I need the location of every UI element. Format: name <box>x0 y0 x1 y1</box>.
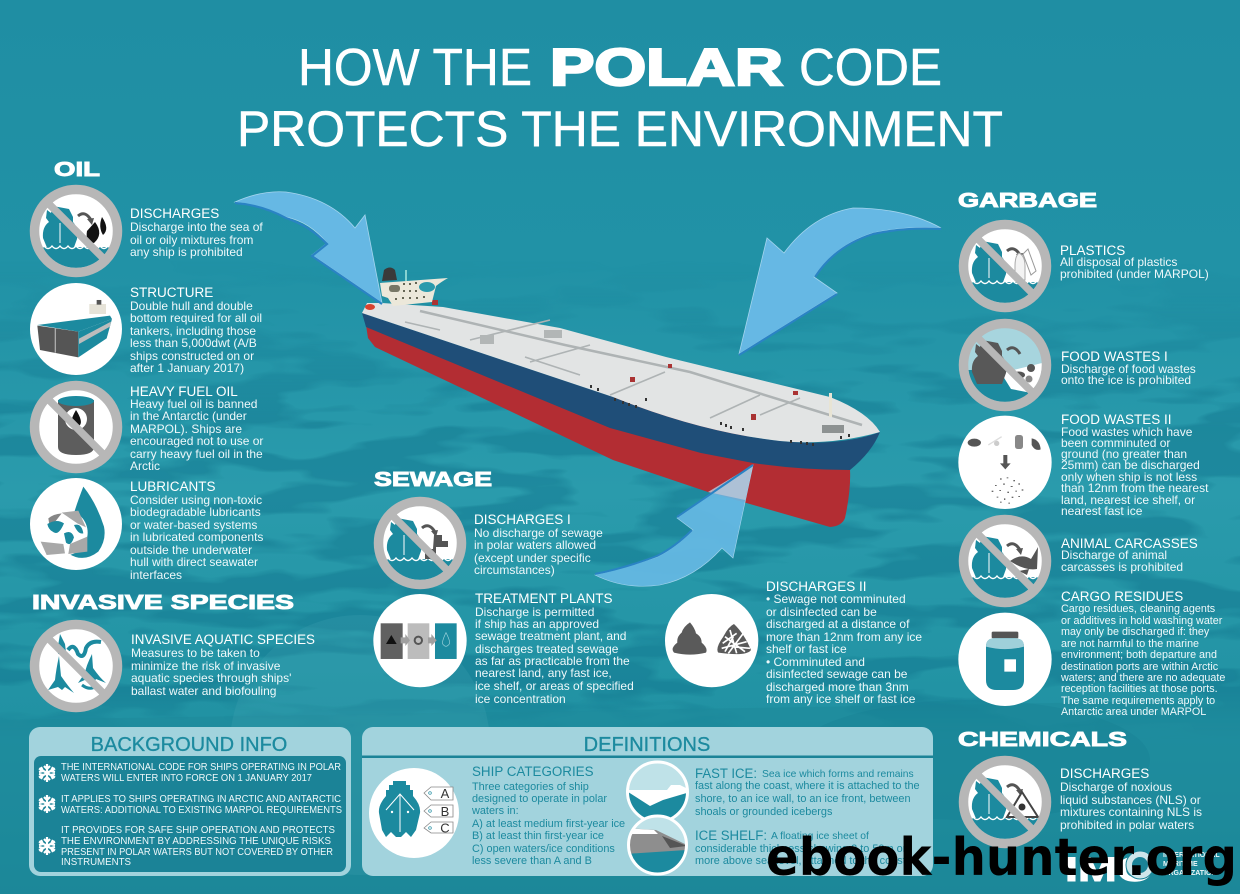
text: cargo residues: CARGO RESIDUES <box>1061 589 1183 604</box>
text: lubricants: LUBRICANTS <box>130 479 216 494</box>
deck <box>362 303 880 442</box>
text: plastics: All disposal of plastics <box>1060 255 1177 269</box>
text: ship categories: B) at least thin first-year ice <box>472 830 604 842</box>
text: entry into force: THE INTERNATIONAL CODE FOR SHIPS OPERATING IN POLAR <box>61 762 341 773</box>
heading: chemicals: CHEMICALS <box>958 729 1127 751</box>
text: cargo residues: environment; both departure and <box>1061 649 1217 661</box>
text: ice shelf: more above sea level, attached to the coast <box>695 855 906 867</box>
arrow: to oil tanker from the left <box>235 192 382 304</box>
text: discharges I: DISCHARGES I <box>474 512 571 527</box>
text: discharges: oil or oily mixtures from <box>130 233 253 247</box>
icon: comminuted food wastes <box>958 416 1052 509</box>
text: treatment plants: Discharge is permitted <box>475 605 594 619</box>
text: chemical discharges: mixtures containing NLS is <box>1060 805 1202 819</box>
text: structure: Double hull and double <box>130 299 253 313</box>
text: food wastes II: been comminuted or <box>1061 436 1170 450</box>
text: discharges I: in polar waters allowed <box>474 538 596 552</box>
text: discharges II: disinfected sewage can be <box>766 667 908 681</box>
text: food wastes I: onto the ice is prohibited <box>1061 373 1191 387</box>
text: ship categories: C) open waters/ice conditions <box>472 843 615 855</box>
text: ice shelf: A floating ice sheet of <box>771 831 869 842</box>
text: heavy fuel oil: encouraged not to use or <box>130 434 263 448</box>
panel: oil <box>30 159 263 582</box>
logo: IMO: MARITIME <box>1163 861 1198 868</box>
text: invasive aquatic species: Measures to be taken to <box>131 646 260 660</box>
oil tanker ship <box>362 268 880 527</box>
icon: no plastics <box>964 224 1046 312</box>
icon: ship categories: C <box>440 820 450 836</box>
text: discharges II: discharged more than 3nm <box>766 680 909 694</box>
icon: ship categories: B <box>441 804 449 819</box>
text: treatment plants: sewage treatment plant, and <box>475 629 626 643</box>
text: entry into force: WATERS WILL ENTER INTO FORCE ON 1 JANUARY 2017 <box>61 773 312 784</box>
superstructure <box>380 278 448 306</box>
logo: IMO: INTERNATIONAL <box>1163 852 1220 859</box>
text: food wastes II: only when ship is not less <box>1061 470 1197 484</box>
title: CODE <box>799 39 942 97</box>
text: discharges II: • Comminuted and <box>766 655 865 669</box>
title: HOW THE <box>298 39 532 97</box>
text: food wastes II: ground (no greater than <box>1061 447 1187 461</box>
text: chemical discharges: DISCHARGES <box>1060 766 1149 781</box>
text: animal carcasses: Discharge of animal <box>1061 548 1167 562</box>
text: structure: tankers, including those <box>130 324 256 338</box>
text: invasive aquatic species: INVASIVE AQUATIC SPECIES <box>131 632 315 647</box>
text: structure: ships constructed on or <box>130 349 254 363</box>
text: structure: less than 5,000dwt (A/B <box>130 336 257 350</box>
text: lubricants: outside the underwater <box>130 543 252 557</box>
text: application: WATERS: ADDITIONAL TO EXISTING MARPOL REQUIREMENTS <box>61 805 343 816</box>
text: cargo residues: are not harmful to the marine <box>1061 638 1199 650</box>
icon: ship categories: A <box>441 786 450 801</box>
heading: invasive species: INVASIVE SPECIES <box>32 592 294 614</box>
text: safe operation: THE ENVIRONMENT BY ADDRESSING THE UNIQUE RISKS <box>61 836 332 847</box>
title: POLAR <box>550 39 783 97</box>
icon: no invasive aquatic species <box>34 624 118 708</box>
text: chemical discharges: liquid substances (NLS) or <box>1060 793 1201 807</box>
text: heavy fuel oil: MARPOL). Ships are <box>130 422 242 436</box>
text: ship categories: A) at least medium first-year ice <box>472 818 625 830</box>
text: safe operation: INSTRUMENTS <box>61 857 132 868</box>
text: food wastes I: FOOD WASTES I <box>1061 349 1168 364</box>
text: discharges: DISCHARGES <box>130 206 219 221</box>
text: discharges: Discharge into the sea of <box>130 220 263 234</box>
text: discharges I: No discharge of sewage <box>474 526 603 540</box>
text: fast ice: shore, to an ice wall, to an ice front, between <box>695 793 911 805</box>
text: lubricants: in lubricated components <box>130 530 263 544</box>
arrow: to oil tanker from below <box>595 465 753 586</box>
text: chemical discharges: Discharge of noxious <box>1060 780 1172 794</box>
text: animal carcasses: ANIMAL CARCASSES <box>1061 536 1198 551</box>
icon: lubricants drop and globe <box>30 478 122 570</box>
heading: sewage: SEWAGE <box>374 469 492 491</box>
icon: ship categories <box>369 768 459 858</box>
text: heavy fuel oil: carry heavy fuel oil in the <box>130 447 263 461</box>
icon: cargo residue jar <box>958 613 1052 706</box>
text: ship categories: SHIP CATEGORIES <box>472 764 594 779</box>
panel: chemicals <box>958 729 1202 848</box>
text: discharges II: discharged at a distance of <box>766 617 910 631</box>
text: application: IT APPLIES TO SHIPS OPERATING IN ARCTIC AND ANTARCTIC <box>61 794 341 805</box>
panel: definitions <box>362 727 933 877</box>
text: discharges II: shelf or fast ice <box>766 642 847 656</box>
text: lubricants: interfaces <box>130 568 182 582</box>
heading: garbage: GARBAGE <box>958 190 1097 212</box>
text: discharges II: from any ice shelf or fast ice <box>766 692 916 706</box>
text: plastics: prohibited (under MARPOL) <box>1060 267 1209 281</box>
text: fast ice: Sea ice which forms and remains <box>762 769 914 780</box>
panel: background info <box>29 727 351 876</box>
title <box>237 39 1003 157</box>
panel: sewage <box>373 469 922 706</box>
icon: no sewage discharge <box>378 502 462 589</box>
icon: no chemical discharge <box>964 760 1046 848</box>
text: ice shelf: ICE SHELF: <box>695 828 767 843</box>
logo: IMO: ORGANIZATION <box>1163 870 1217 877</box>
text: heavy fuel oil: Arctic <box>130 459 160 473</box>
hull: red lower <box>366 325 850 527</box>
text: food wastes II: than 12nm from the nearest <box>1061 481 1209 495</box>
text: cargo residues: or additives in hold washing water <box>1061 615 1223 627</box>
text: lubricants: hull with direct seawater <box>130 555 258 569</box>
text: treatment plants: ice concentration <box>475 692 566 706</box>
heading: oil: OIL <box>54 159 100 181</box>
text: fast ice: shoals or grounded icebergs <box>695 806 833 818</box>
icon: snowflake 1 <box>39 764 55 782</box>
text: heavy fuel oil: in the Antarctic (under <box>130 409 247 423</box>
text: ship categories: less severe than A and B <box>472 855 592 867</box>
text: plastics: PLASTICS <box>1060 243 1125 258</box>
text: discharges: any ship is prohibited <box>130 245 243 259</box>
text: treatment plants: if ship has an approved <box>475 617 599 631</box>
text: discharges II: • Sewage not comminuted <box>766 592 906 606</box>
icon: ice shelf <box>625 816 691 877</box>
text: lubricants: Consider using non-toxic <box>130 493 262 507</box>
text: cargo residues: destination ports are within Arctic <box>1061 661 1219 673</box>
text: cargo residues: waters; and there are no adequate <box>1060 672 1225 684</box>
text: ship categories: waters in: <box>471 805 519 817</box>
title: PROTECTS THE ENVIRONMENT <box>237 101 1003 157</box>
text: cargo residues: Cargo residues, cleaning agents <box>1061 603 1215 615</box>
text: heavy fuel oil: HEAVY FUEL OIL <box>130 384 238 399</box>
text: food wastes II: land, nearest ice shelf, or <box>1061 493 1195 507</box>
arrow: to oil tanker from the right <box>739 208 941 355</box>
icon: snowflake 3 <box>39 837 55 855</box>
text: treatment plants: TREATMENT PLANTS <box>475 591 613 606</box>
text: food wastes II: nearest fast ice <box>1061 504 1143 518</box>
text: ship categories: Three categories of ship <box>472 781 589 793</box>
text: discharges II: more than 12nm from any ice <box>766 630 922 644</box>
text: safe operation: IT PROVIDES FOR SAFE SHIP OPERATION AND PROTECTS <box>61 825 336 836</box>
icon: no oil discharge <box>34 190 118 277</box>
text: discharges II: DISCHARGES II <box>766 579 867 594</box>
text: structure: bottom required for all oil <box>130 311 262 325</box>
text: treatment plants: as far as practicable from the <box>475 654 630 668</box>
text: invasive aquatic species: ballast water and biofouling <box>131 684 276 698</box>
text: food wastes II: FOOD WASTES II <box>1061 412 1172 427</box>
text: cargo residues: reception facilities at those ports. <box>1061 683 1218 695</box>
text: lubricants: biodegradable lubricants <box>130 505 261 519</box>
text: ice shelf: considerable thickness showing 2 to 50m or <box>695 843 907 855</box>
text: discharges I: circumstances) <box>474 563 555 577</box>
heading: definitions: DEFINITIONS <box>584 734 710 756</box>
text: food wastes I: Discharge of food wastes <box>1061 362 1196 376</box>
text: cargo residues: The same requirements apply to <box>1061 695 1215 707</box>
icon: no heavy fuel oil <box>34 386 118 468</box>
text: cargo residues: may only be discharged if: they <box>1061 626 1210 638</box>
text: discharges I: (except under specific <box>474 551 591 565</box>
deck fittings <box>590 385 850 446</box>
text: discharges II: or disinfected can be <box>766 605 877 619</box>
text: animal carcasses: carcasses is prohibited <box>1061 560 1183 574</box>
icon: no food wastes on ice <box>964 324 1046 410</box>
logo: IMO <box>1065 851 1220 889</box>
deck pipelines <box>405 311 862 425</box>
text: structure: STRUCTURE <box>130 285 213 300</box>
icon: treatment plant <box>373 594 467 687</box>
heading: background info: BACKGROUND INFO <box>91 734 287 756</box>
text: safe operation: PRESENT IN POLAR WATERS BUT NOT COVERED BY OTHER <box>61 847 333 858</box>
text: food wastes II: 25mm) can be discharged <box>1061 458 1200 472</box>
text: heavy fuel oil: Heavy fuel oil is banned <box>130 397 257 411</box>
text: treatment plants: discharges treated sewage <box>475 642 619 656</box>
text: fast ice: FAST ICE: <box>695 766 757 781</box>
text: fast ice: fast along the coast, where it is attached to the <box>695 780 920 792</box>
text: chemical discharges: prohibited in polar waters <box>1060 818 1194 832</box>
hull: blue band <box>362 313 880 470</box>
text: cargo residues: Antarctic area under MARPOL <box>1061 706 1206 718</box>
icon: snowflake 2 <box>39 795 55 813</box>
background: polar sea <box>0 403 1240 894</box>
panel: invasive species <box>32 592 315 708</box>
text: invasive aquatic species: minimize the risk of invasive <box>131 659 281 673</box>
icon: no animal carcasses <box>964 520 1046 607</box>
logo: IMO: IMO <box>1065 851 1153 889</box>
text: lubricants: or water-based systems <box>130 518 257 532</box>
text: treatment plants: ice shelf, or areas of specified <box>475 679 634 693</box>
panel: garbage <box>958 190 1225 718</box>
icon: fast ice <box>625 762 691 824</box>
text: food wastes II: Food wastes which have <box>1061 425 1193 439</box>
text: invasive aquatic species: aquatic species through ships' <box>131 671 291 685</box>
icon: double hull structure <box>30 283 122 375</box>
text: ship categories: designed to operate in polar <box>472 793 607 805</box>
text: treatment plants: nearest land, any fast ice, <box>475 666 612 680</box>
icon: comminuted sewage <box>665 594 758 687</box>
text: structure: after 1 January 2017) <box>130 361 244 375</box>
